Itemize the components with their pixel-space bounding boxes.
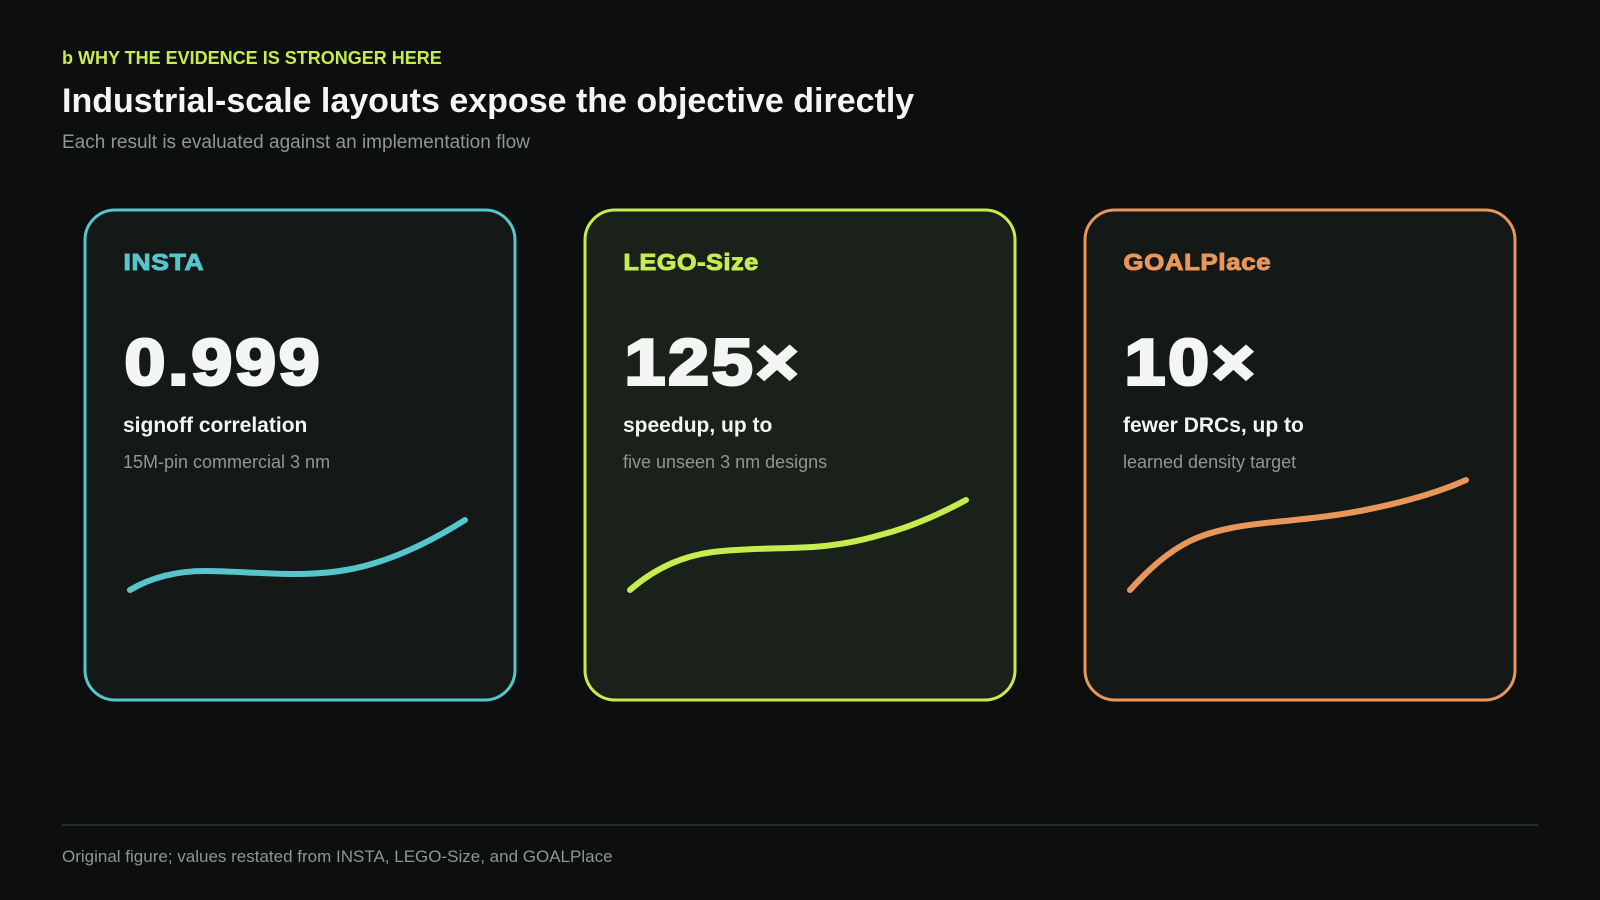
GOALPlace value: 10× (1124, 325, 1258, 399)
GOALPlace name: GOALPlace (1124, 250, 1271, 276)
footer note: Original figure; values restated from INSTA, LEGO-Size, and GOALPlace (62, 847, 613, 866)
LEGO-Size label: speedup, up to (623, 414, 772, 437)
GOALPlace label: fewer DRCs, up to (1123, 414, 1304, 437)
GOALPlace curve (1130, 480, 1466, 590)
panel: LEGO-Size (585, 210, 1015, 700)
INSTA detail: 15M-pin commercial 3 nm (123, 452, 330, 472)
INSTA name: INSTA (124, 251, 204, 276)
panel: GOALPlace (1085, 210, 1515, 700)
LEGO-Size name: LEGO-Size (624, 250, 759, 276)
eyebrow heading: b WHY THE EVIDENCE IS STRONGER HERE (62, 48, 442, 68)
LEGO-Size value: 125× (624, 325, 801, 399)
LEGO-Size curve (630, 500, 966, 590)
INSTA value: 0.999 (124, 325, 322, 399)
INSTA curve (130, 520, 465, 590)
panel: INSTA (85, 210, 515, 700)
INSTA label: signoff correlation (123, 414, 307, 437)
title: Industrial-scale layouts expose the objective directly (62, 82, 914, 120)
subtitle: Each result is evaluated against an implementation flow (62, 132, 530, 153)
LEGO-Size detail: five unseen 3 nm designs (623, 452, 827, 472)
GOALPlace detail: learned density target (1123, 452, 1296, 472)
